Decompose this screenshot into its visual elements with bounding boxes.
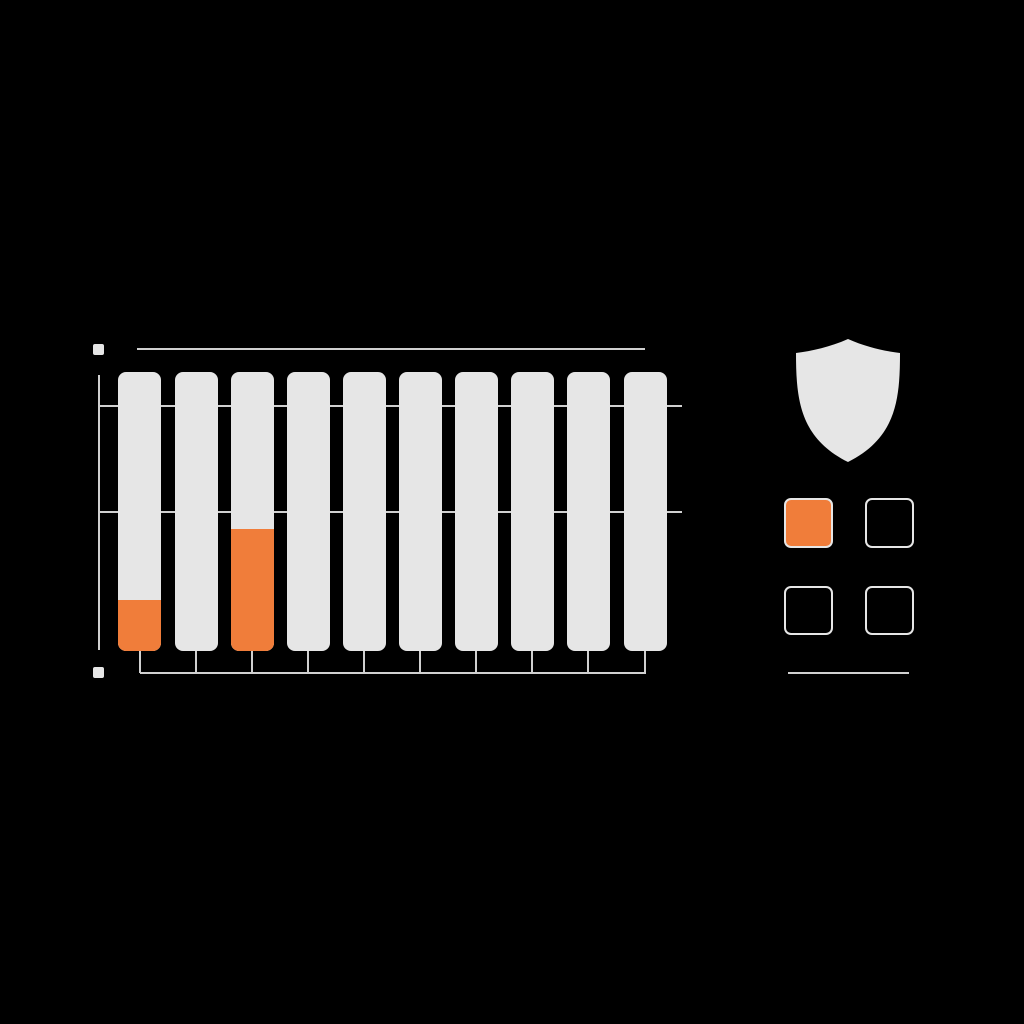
chart: bar chart panel bbox=[93, 344, 682, 678]
legend underline bbox=[788, 672, 909, 674]
bar fill: orange 1 bbox=[118, 600, 161, 651]
icon: small square top marker bbox=[93, 344, 104, 355]
bar fill: orange 3 bbox=[231, 529, 274, 651]
legend square: empty 3 bbox=[785, 587, 832, 634]
legend square: orange bbox=[785, 499, 832, 547]
infographic canvas bbox=[93, 339, 914, 678]
icon: small square bottom marker bbox=[93, 667, 104, 678]
legend square: empty 2 bbox=[866, 499, 913, 547]
icon: shield bbox=[796, 339, 900, 462]
bars bbox=[118, 372, 667, 651]
panel: side legend bbox=[785, 339, 913, 673]
legend square: empty 4 bbox=[866, 587, 913, 634]
chart frame lines bbox=[99, 349, 682, 673]
